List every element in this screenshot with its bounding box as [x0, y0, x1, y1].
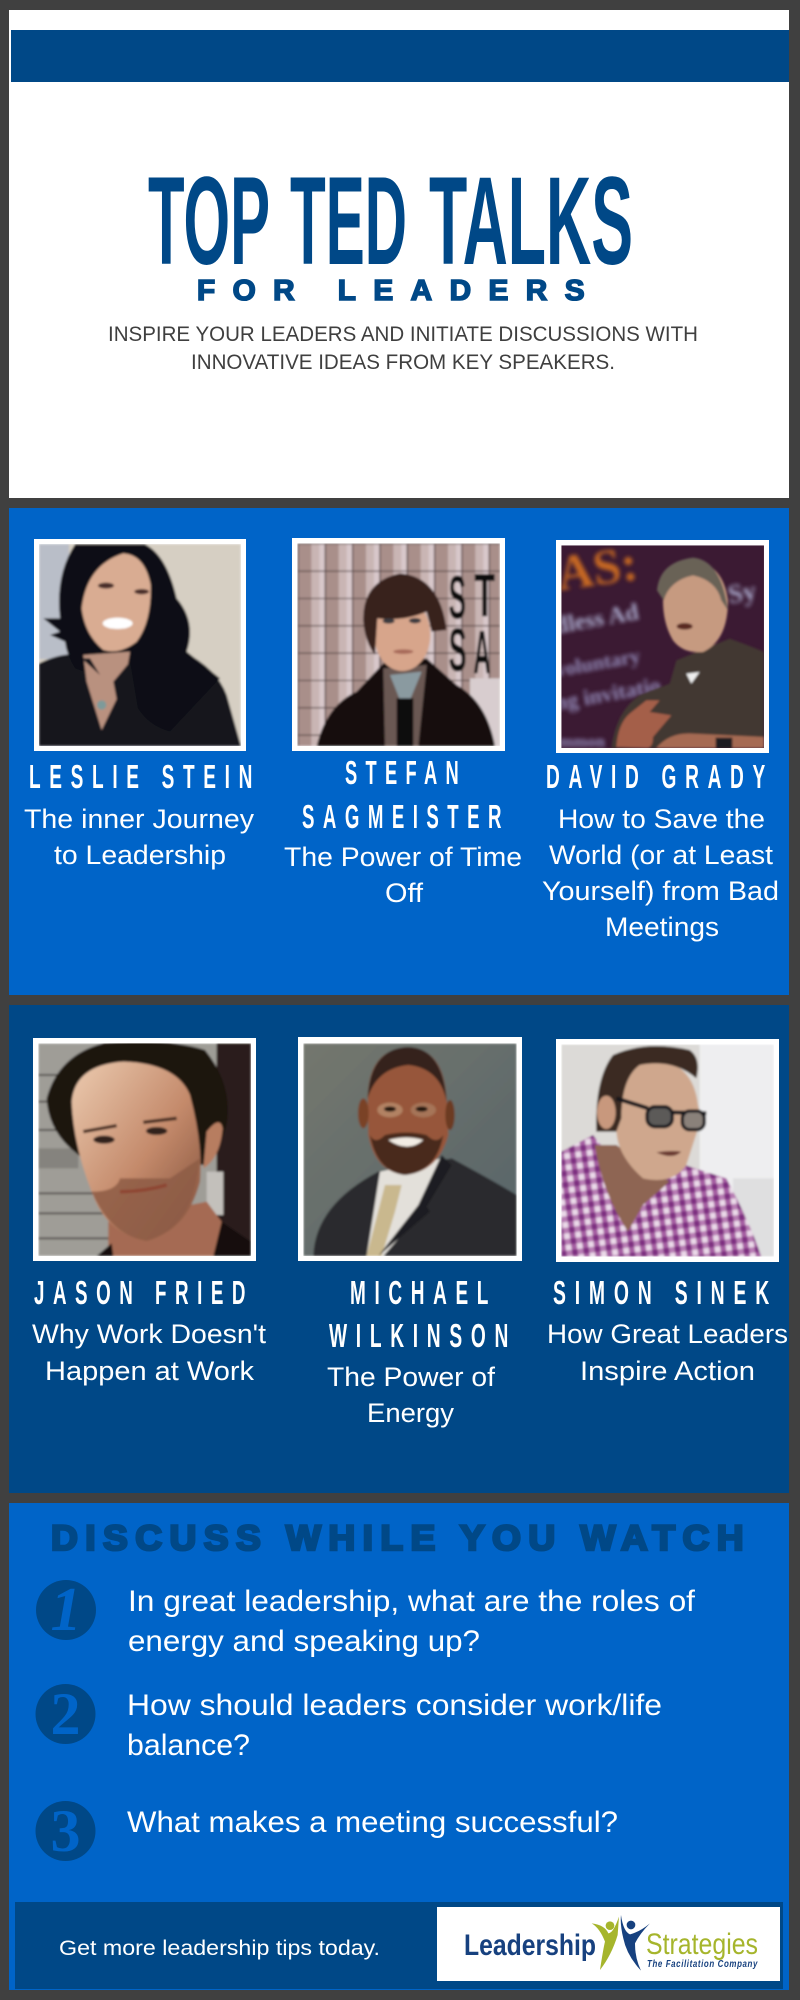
photo: Stefan Sagmeister: S — [449, 616, 467, 685]
talk title: The Power of Time — [284, 842, 522, 872]
question 3 — [36, 1798, 618, 1864]
talk title: to Leadership — [54, 840, 226, 870]
logo: Leadership Strategies: Leadership — [464, 1929, 596, 1962]
talk title — [32, 1319, 267, 1386]
name: LESLIE STEIN — [29, 758, 261, 795]
number badge 3 — [36, 1798, 96, 1864]
talk title: Inspire Action — [580, 1356, 755, 1386]
question text 2 — [127, 1689, 662, 1762]
speaker: Michael Wilkinson — [298, 1037, 522, 1428]
talk title: Why Work Doesn't — [32, 1319, 267, 1349]
talk title — [542, 804, 779, 942]
name — [302, 754, 510, 835]
talk title — [327, 1362, 496, 1428]
speaker: Stefan Sagmeister — [284, 538, 522, 908]
talk title: Happen at Work — [45, 1356, 255, 1386]
title — [148, 152, 633, 291]
number badge 2 — [36, 1681, 96, 1747]
speaker: Leslie Stein — [24, 539, 261, 870]
question text 1: In great leadership, what are the roles of — [128, 1585, 696, 1618]
heading: DISCUSS WHILE YOU WATCH — [51, 1519, 751, 1558]
talk title: The inner Journey — [24, 804, 255, 834]
photo: David Grady: ng invitatio — [553, 672, 662, 715]
number badge 2: 2 — [50, 1681, 80, 1747]
photo: Simon Sinek — [556, 1039, 779, 1262]
photo: Leslie Stein — [34, 539, 246, 751]
question 1 — [36, 1576, 696, 1658]
number badge 1 — [36, 1576, 96, 1644]
panel: speakers row 1 — [9, 508, 789, 995]
name: STEFAN — [345, 754, 467, 791]
logo: Leadership Strategies: Strategies — [646, 1928, 758, 1961]
talk title: World (or at Least — [549, 840, 774, 870]
name: SAGMEISTER — [302, 798, 510, 835]
photo: Stefan Sagmeister: A — [473, 618, 491, 687]
title: TOP — [148, 152, 270, 291]
speaker: David Grady — [542, 535, 779, 942]
talk title: Yourself) from Bad — [542, 876, 779, 906]
number badge 1: 1 — [50, 1576, 82, 1644]
title: TED — [290, 152, 407, 291]
panel: discussion questions — [9, 1503, 789, 1990]
question text 1 — [128, 1585, 696, 1658]
talk title: How Great Leaders — [547, 1319, 788, 1349]
name: MICHAEL — [350, 1274, 497, 1311]
photo: Michael Wilkinson — [298, 1037, 522, 1261]
intro text: INNOVATIVE IDEAS FROM KEY SPEAKERS. — [191, 351, 615, 374]
speaker: Jason Fried — [32, 1038, 267, 1386]
question text 1: energy and speaking up? — [128, 1625, 480, 1658]
photo: David Grady: mmon — [560, 732, 606, 751]
logo figures — [592, 1915, 650, 1971]
photo: Stefan Sagmeister: T — [474, 562, 495, 631]
photo: David Grady: dless Ad — [553, 599, 641, 640]
name — [329, 1274, 517, 1354]
panel: speakers row 2 — [9, 1005, 789, 1493]
name: JASON FRIED — [34, 1274, 254, 1311]
photo: David Grady — [553, 535, 769, 753]
footer bar — [15, 1902, 783, 1989]
talk title: Meetings — [605, 912, 719, 942]
question text 2: balance? — [127, 1729, 250, 1762]
talk title: The Power of — [327, 1362, 496, 1392]
name: WILKINSON — [329, 1317, 517, 1354]
photo: David Grady: Sy — [725, 575, 759, 610]
subtitle: FOR LEADERS — [197, 275, 602, 307]
number badge 3: 3 — [50, 1798, 80, 1864]
speaker: Simon Sinek — [547, 1039, 788, 1386]
question text 2: How should leaders consider work/life — [127, 1689, 662, 1722]
photo: Stefan Sagmeister — [292, 538, 505, 751]
photo: Jason Fried — [33, 1038, 256, 1261]
header bar — [11, 30, 789, 82]
photo: Stefan Sagmeister: S — [449, 563, 466, 632]
panel: header — [9, 10, 789, 498]
logo: Leadership Strategies: The Facilitation Company — [647, 1958, 758, 1970]
talk title: How to Save the — [558, 804, 765, 834]
photo: David Grady: AS: — [553, 535, 641, 601]
intro text: INSPIRE YOUR LEADERS AND INITIATE DISCUSSIONS WITH — [108, 323, 698, 346]
logo: Leadership Strategies — [437, 1907, 780, 1981]
intro text — [108, 323, 698, 374]
talk title — [24, 804, 255, 870]
talk title: Energy — [367, 1398, 455, 1428]
talk title: Off — [385, 878, 424, 908]
call to action: Get more leadership tips today. — [59, 1936, 380, 1960]
question text 3: What makes a meeting successful? — [127, 1806, 618, 1839]
talk title — [547, 1319, 788, 1386]
photo: David Grady: voluntary — [553, 645, 643, 682]
talk title — [284, 842, 522, 908]
question 2 — [36, 1681, 662, 1762]
